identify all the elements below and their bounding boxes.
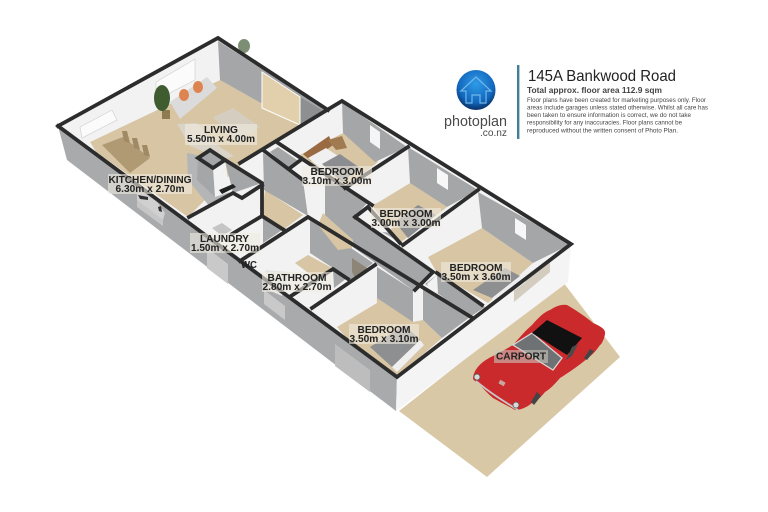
panel: corridor <box>263 153 433 290</box>
panel: bedroom 1 <box>263 102 407 188</box>
subheading: floor area: Total approx. floor area 112.9 sqm <box>527 85 662 95</box>
room label: laundry: LAUNDRY <box>200 233 249 245</box>
room label: bedroom 1: 3.10m x 3.00m <box>302 175 372 187</box>
exterior wall: right <box>396 244 571 411</box>
house interior base <box>58 38 571 377</box>
room label: kitchen/dining <box>108 174 192 195</box>
sofa <box>170 77 217 119</box>
room label: bedroom 3: 3.50m x 3.60m <box>442 271 510 283</box>
room label: laundry: 1.50m x 2.70m <box>191 242 259 254</box>
rug <box>213 108 260 143</box>
room label: WC: WC <box>241 259 257 271</box>
plant <box>162 110 170 119</box>
kitchen units <box>187 153 232 207</box>
room label: bedroom 1 <box>302 166 372 187</box>
walls <box>58 38 571 377</box>
living door <box>262 72 300 125</box>
disclaimer text: been taken to ensure information is correct, we do not take <box>527 113 692 119</box>
disclaimer text: Floor plans have been created for marketing purposes only. Floor <box>527 98 706 104</box>
room label: bedroom 2 <box>371 208 441 229</box>
plant outside <box>238 39 250 53</box>
room label: laundry <box>190 233 260 254</box>
panel: living and kitchen room <box>62 41 327 220</box>
room label: bedroom 4: BEDROOM <box>358 324 411 336</box>
dining table <box>102 137 150 173</box>
room label: living: 5.50m x 4.00m <box>187 133 255 145</box>
panel: bedroom 4 <box>313 267 470 377</box>
panel: service core <box>197 150 303 230</box>
logo: photoplan: .co.nz <box>480 128 507 139</box>
room label: bathroom <box>262 272 332 293</box>
room label: kitchen/dining: 6.30m x 2.70m <box>116 183 184 195</box>
icon: house in blue circle <box>456 70 496 110</box>
disclaimer text <box>527 98 708 134</box>
room label: bedroom 3 <box>441 262 511 283</box>
panel: bathroom <box>243 218 373 306</box>
room label: bedroom 2: 3.00m x 3.00m <box>372 217 440 229</box>
room label: bedroom 1: BEDROOM <box>310 166 364 178</box>
room label: bedroom 4 <box>349 324 419 345</box>
kitchen window <box>80 110 117 138</box>
room label: living <box>185 124 257 145</box>
room label: kitchen/dining: KITCHEN/DINING <box>108 174 192 186</box>
room label: bathroom: BATHROOM <box>268 272 327 284</box>
disclaimer text: areas include garages unless stated otherwise. Whilst all care has <box>527 106 708 112</box>
room label: bedroom 2: BEDROOM <box>380 208 433 220</box>
room label: carport: CARPORT <box>496 350 547 362</box>
logo: photoplan: photoplan <box>444 114 507 130</box>
armchair <box>177 123 234 160</box>
divider bar <box>517 65 519 139</box>
car <box>473 305 605 410</box>
room label: bedroom 3: BEDROOM <box>450 262 503 274</box>
room label: bathroom: 2.80m x 2.70m <box>262 281 332 293</box>
living windows <box>156 59 195 100</box>
exterior wall: front <box>58 126 397 411</box>
carport slab <box>399 282 620 477</box>
heading: 145A Bankwood Road <box>528 68 676 85</box>
panel: bedroom 3 <box>403 192 571 317</box>
room label: living: LIVING <box>204 124 238 136</box>
disclaimer text: reproduced without the written consent of Photo Plan. <box>527 128 678 134</box>
logo: photoplan <box>444 70 507 139</box>
disclaimer text: responsibility for any inaccuracies. Floor plans cannot be <box>527 120 683 126</box>
room label: bedroom 4: 3.50m x 3.10m <box>350 333 418 345</box>
panel: laundry and WC <box>190 194 282 261</box>
panel: bedroom 2 <box>345 147 478 243</box>
